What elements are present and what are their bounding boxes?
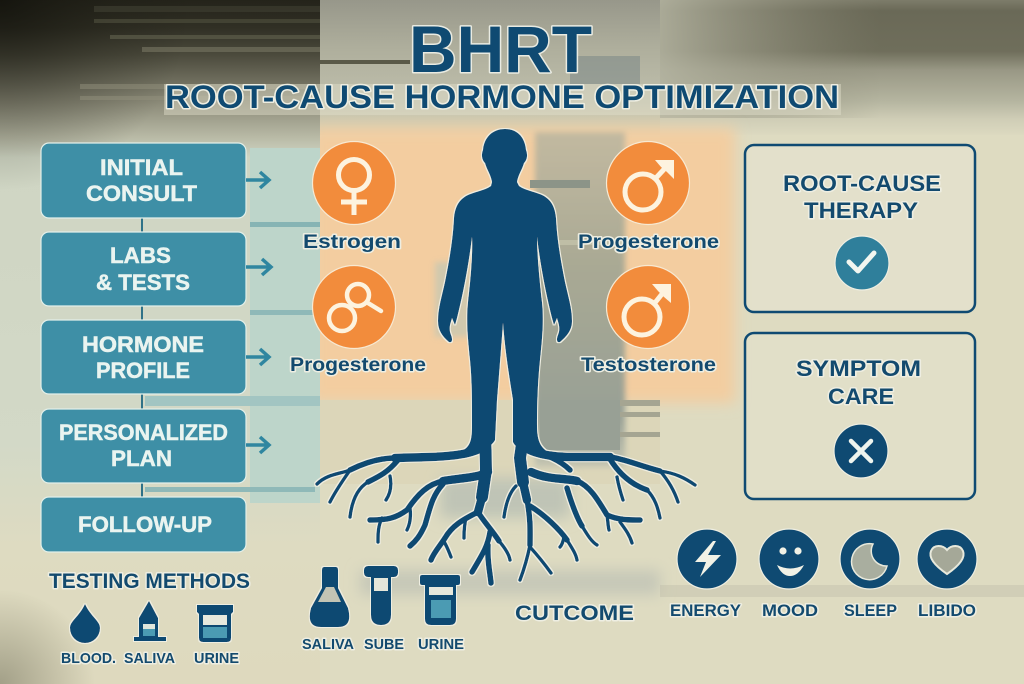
step: personalized plan: PERSONALIZED <box>59 420 228 445</box>
icon: cross <box>834 424 888 478</box>
icon: energy <box>677 529 737 589</box>
subtitle: ROOT-CAUSE HORMONE OPTIMIZATION <box>165 79 839 115</box>
step: labs and tests: & TESTS <box>96 270 190 295</box>
icon: blood drop <box>70 604 100 643</box>
icon: flask <box>310 567 349 627</box>
label: urine small: URINE <box>194 650 239 667</box>
icon: progesterone right <box>606 142 690 224</box>
icon: progesterone left <box>312 266 396 348</box>
heading: outcome: CUTCOME <box>515 602 634 625</box>
label: energy: ENERGY <box>670 602 741 620</box>
panel: root-cause therapy <box>745 145 975 312</box>
step: hormone profile: HORMONE <box>82 332 204 357</box>
arrow: labs and tests <box>246 259 271 275</box>
label: saliva small: SALIVA <box>124 650 175 667</box>
arrow: personalized plan <box>246 437 269 453</box>
panel: symptom care: SYMPTOM <box>796 356 921 381</box>
icon: estrogen <box>312 142 396 224</box>
arrow: hormone profile <box>246 349 269 365</box>
human figure with roots <box>317 129 695 583</box>
panel: root-cause therapy: ROOT-CAUSE <box>783 171 941 196</box>
arrow: initial consult <box>246 172 269 188</box>
panel: symptom care <box>745 333 975 499</box>
step: hormone profile <box>41 320 246 394</box>
panel: root-cause therapy: THERAPY <box>804 198 918 223</box>
step: labs and tests: LABS <box>110 243 171 268</box>
step: personalized plan: PLAN <box>111 446 172 471</box>
label: libido: LIBIDO <box>918 602 976 620</box>
icon: testosterone <box>606 266 690 348</box>
panel: symptom care: CARE <box>828 384 894 409</box>
panel: process steps <box>41 143 246 552</box>
label: progesterone left: Progesterone <box>290 354 426 376</box>
body silhouette <box>438 129 572 453</box>
step: personalized plan <box>41 409 246 483</box>
step: follow-up: FOLLOW-UP <box>78 512 212 537</box>
label: progesterone right: Progesterone <box>578 231 719 253</box>
step: hormone profile: PROFILE <box>96 358 190 383</box>
step: labs and tests <box>41 232 246 306</box>
step: initial consult: INITIAL <box>100 155 183 180</box>
step: initial consult: CONSULT <box>86 181 198 206</box>
label: sube: SUBE <box>364 636 404 653</box>
label: sleep: SLEEP <box>844 602 897 620</box>
right roots <box>504 430 695 580</box>
label: estrogen: Estrogen <box>303 231 401 253</box>
label: blood: BLOOD. <box>61 650 116 667</box>
icon: saliva small <box>134 601 166 641</box>
label: urine cup: URINE <box>418 636 464 653</box>
label: mood: MOOD <box>762 602 818 620</box>
icon: urine small <box>197 605 233 642</box>
icon: check <box>835 236 889 290</box>
label: testosterone: Testosterone <box>581 354 716 376</box>
label: saliva flask: SALIVA <box>302 636 354 653</box>
title: BHRT <box>409 12 592 86</box>
left roots <box>317 430 510 583</box>
icon: libido <box>917 529 977 589</box>
icon: sleep <box>840 529 900 589</box>
icon: mood <box>759 529 819 589</box>
heading: testing methods: TESTING METHODS <box>49 570 250 593</box>
step: initial consult <box>41 143 246 218</box>
icon: test tube <box>364 566 398 625</box>
step: follow-up <box>41 497 246 552</box>
icon: urine cup <box>420 575 460 625</box>
